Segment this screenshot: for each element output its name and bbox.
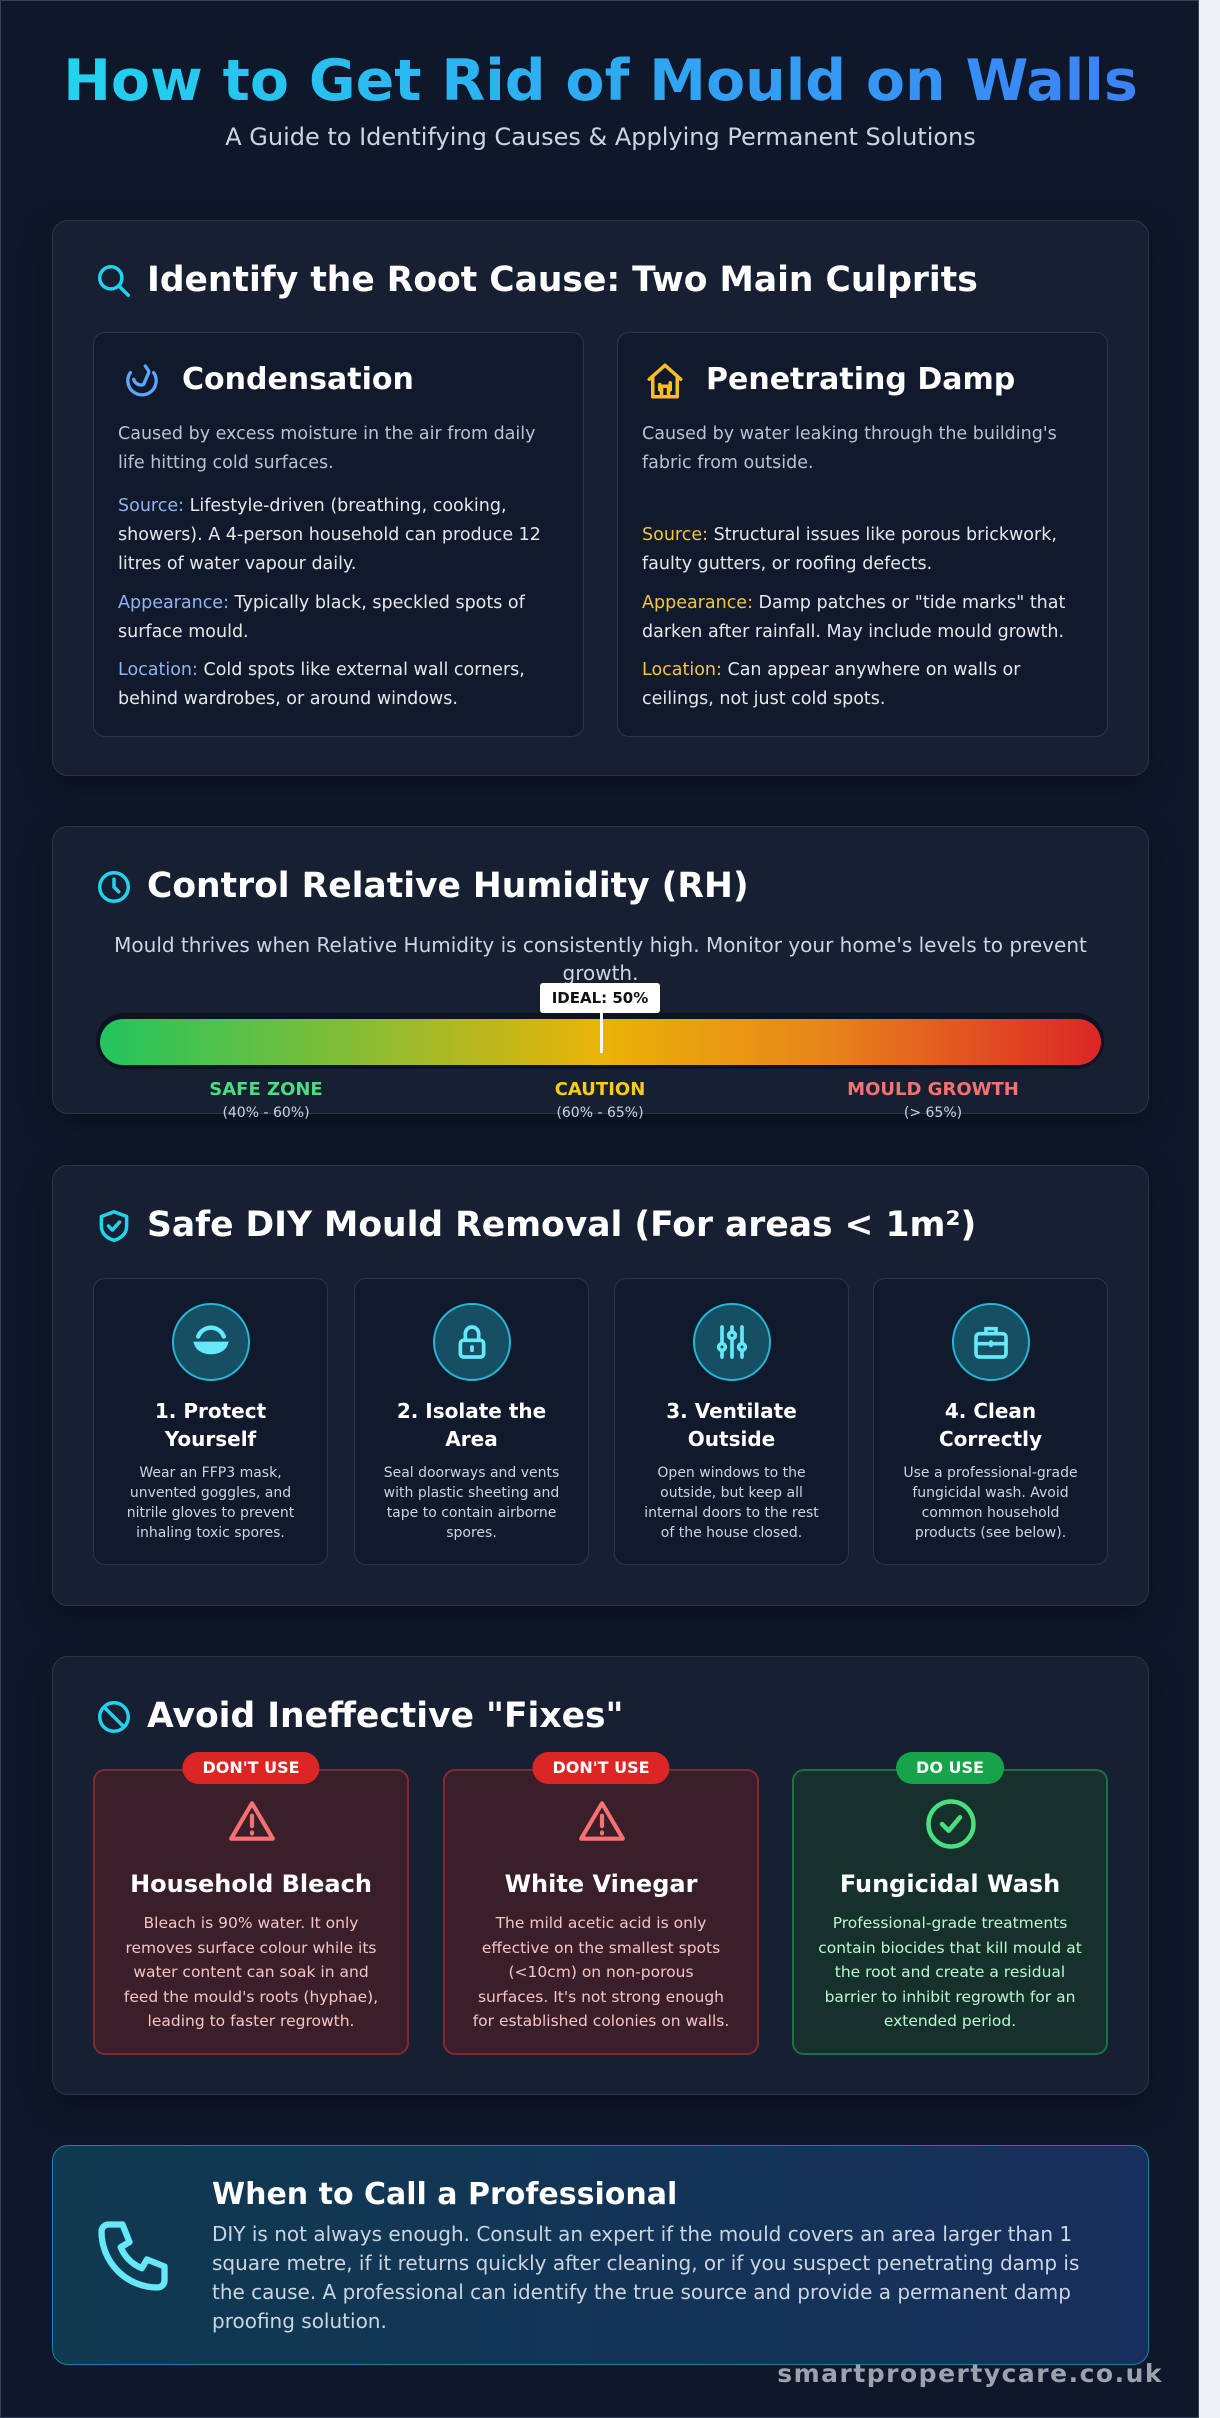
card: bleach — [93, 1769, 409, 2055]
card: vinegar: White Vinegar — [505, 1870, 697, 1898]
humidity bar: CAUTION — [555, 1079, 645, 1100]
card: fungicidal wash: Professional-grade treatments contain biocides that kill mould at the root and create a residual barrier to inhibit regrowth for an extended period. — [818, 1914, 1082, 2030]
humidity bar — [96, 983, 1104, 1121]
heading: Control Relative Humidity (RH) — [147, 866, 749, 906]
card: bleach: Bleach is 90% water. It only removes surface colour while its water content can soak in and feed the mould's roots (hyphae), leading to faster regrowth. — [124, 1914, 378, 2030]
card: vinegar — [443, 1769, 759, 2055]
icon: droplet — [126, 364, 158, 396]
card: penetrating damp: Source: Structural issues like porous brickwork, faulty gutters, or roofing defects. — [642, 525, 1057, 574]
humidity bar: MOULD GROWTH — [847, 1079, 1019, 1100]
step 1: 1. Protect — [155, 1399, 266, 1423]
humidity bar: (40% - 60%) — [222, 1105, 310, 1121]
step 3: Outside — [688, 1427, 775, 1451]
step 4: Use a professional-grade fungicidal wash. Avoid common household products (see below). — [903, 1465, 1078, 1541]
card: bleach: Household Bleach — [130, 1870, 372, 1898]
step 2: Area — [445, 1427, 498, 1451]
icon: clock — [98, 871, 130, 903]
card: vinegar: surfaces. It's not strong enough — [478, 1988, 724, 2006]
legend labels: SAFE ZONE — [209, 1079, 323, 1100]
card: vinegar: (<10cm) on non-porous — [508, 1963, 694, 1981]
card: vinegar: effective on the smallest spots — [482, 1938, 720, 1956]
text: DON'T USE — [552, 1758, 650, 1777]
step 1: Yourself — [165, 1427, 256, 1451]
card: condensation — [93, 332, 584, 737]
step 4: Correctly — [939, 1427, 1042, 1451]
panel: avoid fixes — [52, 1656, 1149, 2095]
marker — [600, 1013, 603, 1053]
description: Mould thrives when Relative Humidity is consistently high. Monitor your home's levels to prevent growth. — [114, 933, 1087, 985]
card: penetrating damp — [617, 332, 1108, 737]
humidity bar: (> 65%) — [904, 1105, 962, 1121]
humidity bar: (60% - 65%) — [556, 1105, 644, 1121]
footer: smartpropertycare.co.uk — [777, 2359, 1163, 2388]
panel: humidity — [52, 826, 1149, 1114]
step 3 — [614, 1278, 849, 1565]
card: condensation: Source: Lifestyle-driven (breathing, cooking, showers). A 4-person household can produce 12 litres of water vapour daily. — [118, 496, 541, 574]
text: Caused by excess moisture in the air from daily life hitting cold surfaces. — [118, 424, 535, 473]
heading: Identify the Root Cause: Two Main Culprits — [147, 260, 978, 300]
step 2: Seal doorways and vents with plastic sheeting and tape to contain airborne spores. — [384, 1465, 559, 1541]
heading: Safe DIY Mould Removal (For areas < 1m²) — [147, 1205, 976, 1245]
step 4 — [873, 1278, 1108, 1565]
callout: professional — [52, 2145, 1149, 2365]
step 3: Open windows to the outside, but keep all internal doors to the rest of the house closed. — [644, 1465, 819, 1541]
card: fungicidal wash: Fungicidal Wash — [840, 1870, 1060, 1898]
card: fungicidal wash — [792, 1769, 1108, 2055]
step 4: 4. Clean — [945, 1399, 1036, 1423]
title: How to Get Rid of Mould on Walls — [63, 48, 1138, 114]
humidity bar: IDEAL: 50% — [552, 989, 648, 1007]
panel: DIY removal — [52, 1165, 1149, 1606]
text: DO USE — [916, 1758, 984, 1777]
text: Caused by water leaking through the building's fabric from outside. — [642, 424, 1057, 473]
card: condensation: Location: Cold spots like external wall corners, behind wardrobes, or around windows. — [118, 660, 525, 709]
heading: Avoid Ineffective "Fixes" — [147, 1696, 624, 1736]
step 2: 2. Isolate the — [397, 1399, 546, 1423]
card: vinegar: The mild acetic acid is only — [496, 1914, 706, 1932]
panel: root cause — [52, 220, 1149, 776]
step 1 — [93, 1278, 328, 1565]
card: vinegar: for established colonies on walls. — [473, 2012, 729, 2030]
icon: ban — [98, 1701, 130, 1733]
card title: Penetrating Damp — [706, 362, 1015, 397]
card: penetrating damp: Location: Can appear anywhere on walls or ceilings, not just cold spots. — [642, 660, 1020, 709]
icon: magnifier — [98, 265, 130, 298]
body: DIY is not always enough. Consult an expert if the mould covers an area larger than 1 square metre, if it returns quickly after cleaning, or if you suspect penetrating damp is the cause. A professional can identify the true source and provide a permanent damp proofing solution. — [212, 2222, 1079, 2333]
step 3: 3. Ventilate — [666, 1399, 797, 1423]
step 2 — [354, 1278, 589, 1565]
icon: house — [647, 363, 683, 398]
text: DON'T USE — [202, 1758, 300, 1777]
card: penetrating damp: Appearance: Damp patches or "tide marks" that darken after rainfall. May include mould growth. — [642, 593, 1065, 642]
subtitle: A Guide to Identifying Causes & Applying Permanent Solutions — [225, 123, 976, 151]
card title: Condensation — [182, 362, 414, 397]
heading: When to Call a Professional — [212, 2177, 677, 2212]
step 1: Wear an FFP3 mask, unvented goggles, and nitrile gloves to prevent inhaling toxic spores. — [127, 1465, 294, 1541]
icon: phone — [98, 2221, 168, 2291]
card: condensation: Appearance: Typically black, speckled spots of surface mould. — [118, 593, 525, 642]
icon: shield — [100, 1210, 128, 1242]
